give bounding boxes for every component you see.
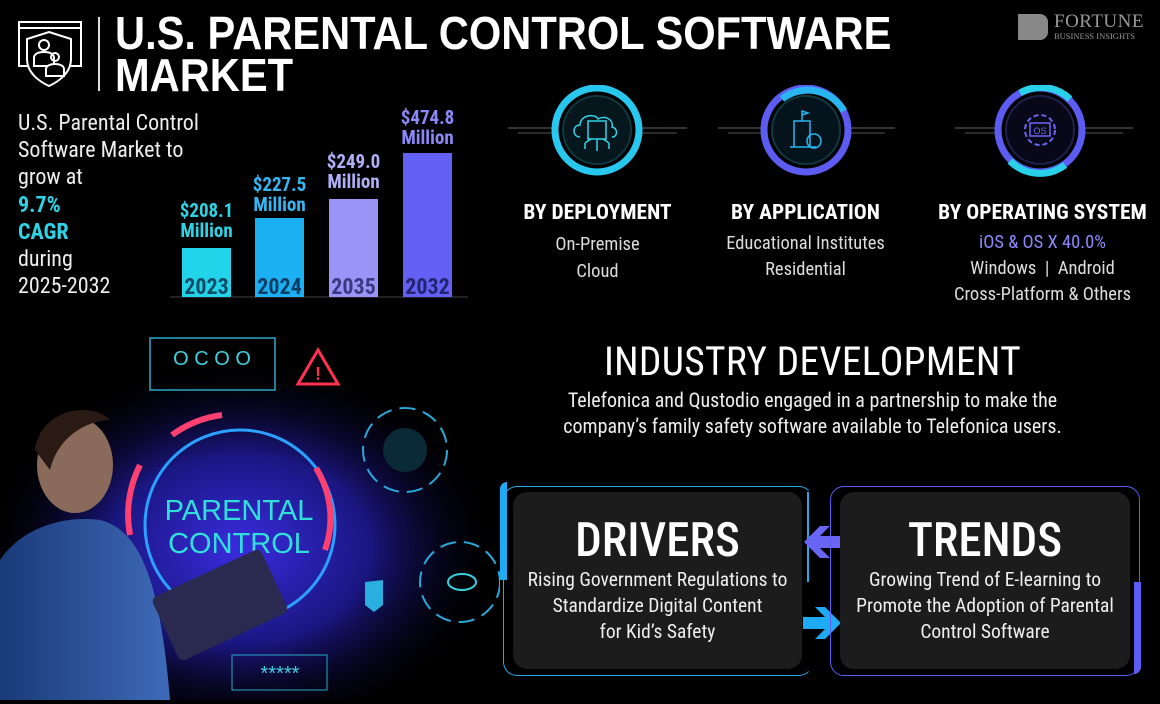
panel: trends: Promote the Adoption of Parental bbox=[856, 594, 1114, 617]
heading: industry development: INDUSTRY DEVELOPMENT bbox=[604, 338, 1021, 385]
panel: trends: Growing Trend of E-learning to bbox=[869, 568, 1101, 591]
panel: drivers: for Kid’s Safety bbox=[600, 620, 715, 643]
text: industry development: Telefonica and Qustodio engaged in a partnership to make the company’s family safety software available to Telefonica users. bbox=[563, 388, 1062, 438]
arrow: drivers to trends bbox=[803, 607, 840, 639]
panel: trends bbox=[830, 486, 1141, 676]
illustration: child with parental control hologram: CONTROL bbox=[168, 528, 310, 560]
heading: drivers: DRIVERS bbox=[575, 513, 740, 568]
segment: by deployment bbox=[508, 85, 687, 282]
icon: OS gear: OS bbox=[1033, 126, 1047, 136]
bar chart: Million bbox=[253, 193, 306, 216]
bar chart bbox=[170, 106, 468, 300]
illustration: child with parental control hologram: PARENTAL bbox=[165, 495, 313, 527]
title: U.S. PARENTAL CONTROL SOFTWARE bbox=[115, 7, 891, 59]
bar chart: Million bbox=[327, 170, 380, 193]
illustration: child with parental control hologram bbox=[0, 337, 500, 700]
text: CAGR summary: grow at bbox=[18, 165, 83, 190]
text: CAGR summary: 9.7% bbox=[18, 193, 61, 218]
text: CAGR summary: U.S. Parental Control bbox=[18, 111, 199, 136]
segment: by operating system bbox=[938, 85, 1147, 305]
bar chart: 2024 bbox=[257, 275, 302, 300]
illustration: child with parental control hologram: O C O O bbox=[173, 348, 251, 370]
panel: drivers: Standardize Digital Content bbox=[553, 594, 762, 617]
text: CAGR summary: CAGR bbox=[18, 220, 69, 245]
segment: by application bbox=[718, 85, 895, 280]
bar chart: Million bbox=[180, 219, 233, 242]
title bbox=[115, 7, 891, 101]
text: CAGR summary: Software Market to bbox=[18, 138, 183, 163]
bar chart: 2035 bbox=[331, 275, 376, 300]
heading: trends: TRENDS bbox=[908, 513, 1062, 568]
divider bbox=[98, 17, 100, 91]
bar chart: $227.5 bbox=[253, 173, 306, 196]
logo: Fortune Business Insights bbox=[1018, 11, 1144, 41]
panel: drivers: Rising Government Regulations to bbox=[528, 568, 787, 591]
logo: Fortune Business Insights: BUSINESS INSIGHTS bbox=[1054, 31, 1135, 41]
icon: OS gear bbox=[955, 85, 1133, 177]
bar chart: $474.8 bbox=[401, 106, 454, 129]
segment: by operating system: BY OPERATING SYSTEM bbox=[938, 200, 1147, 225]
illustration: child with parental control hologram: ***** bbox=[261, 663, 300, 685]
segment: by operating system: Windows | Android bbox=[970, 257, 1115, 279]
title: MARKET bbox=[115, 49, 293, 101]
illustration: child with parental control hologram: ! bbox=[316, 364, 320, 385]
bar 2024 bbox=[255, 218, 304, 297]
icon: cloud server bbox=[508, 85, 687, 176]
segment: by application: Educational Institutes bbox=[726, 232, 885, 254]
bar chart: 2032 bbox=[405, 275, 450, 300]
segment: by operating system: iOS & OS X 40.0% bbox=[979, 231, 1106, 253]
text: CAGR summary: during bbox=[18, 247, 73, 272]
segment: by deployment: On-Premise bbox=[555, 233, 640, 255]
heading: BY DEPLOYMENT bbox=[523, 200, 672, 225]
segment: by application: BY APPLICATION bbox=[731, 200, 880, 225]
segment: by application: Residential bbox=[765, 258, 846, 280]
segment: by operating system: Cross-Platform & Others bbox=[954, 283, 1131, 305]
bar chart: 2023 bbox=[184, 275, 229, 300]
text: CAGR summary bbox=[18, 111, 199, 299]
bar 2023 bbox=[182, 248, 231, 297]
text: CAGR summary: 2025-2032 bbox=[18, 274, 110, 299]
icon: parental shield bbox=[18, 21, 82, 88]
panel: drivers bbox=[500, 482, 809, 676]
arrow: trends to drivers bbox=[804, 526, 840, 558]
bar 2032 bbox=[403, 153, 452, 297]
panel: trends: Control Software bbox=[920, 620, 1050, 643]
bar 2035 bbox=[329, 199, 378, 297]
bar chart: Million bbox=[401, 126, 454, 149]
segment: by deployment: Cloud bbox=[576, 260, 619, 282]
icon: school bbox=[718, 85, 895, 176]
logo: Fortune Business Insights: FORTUNE bbox=[1054, 11, 1144, 32]
bar chart: $249.0 bbox=[327, 150, 380, 173]
bar chart: $208.1 bbox=[180, 199, 233, 222]
